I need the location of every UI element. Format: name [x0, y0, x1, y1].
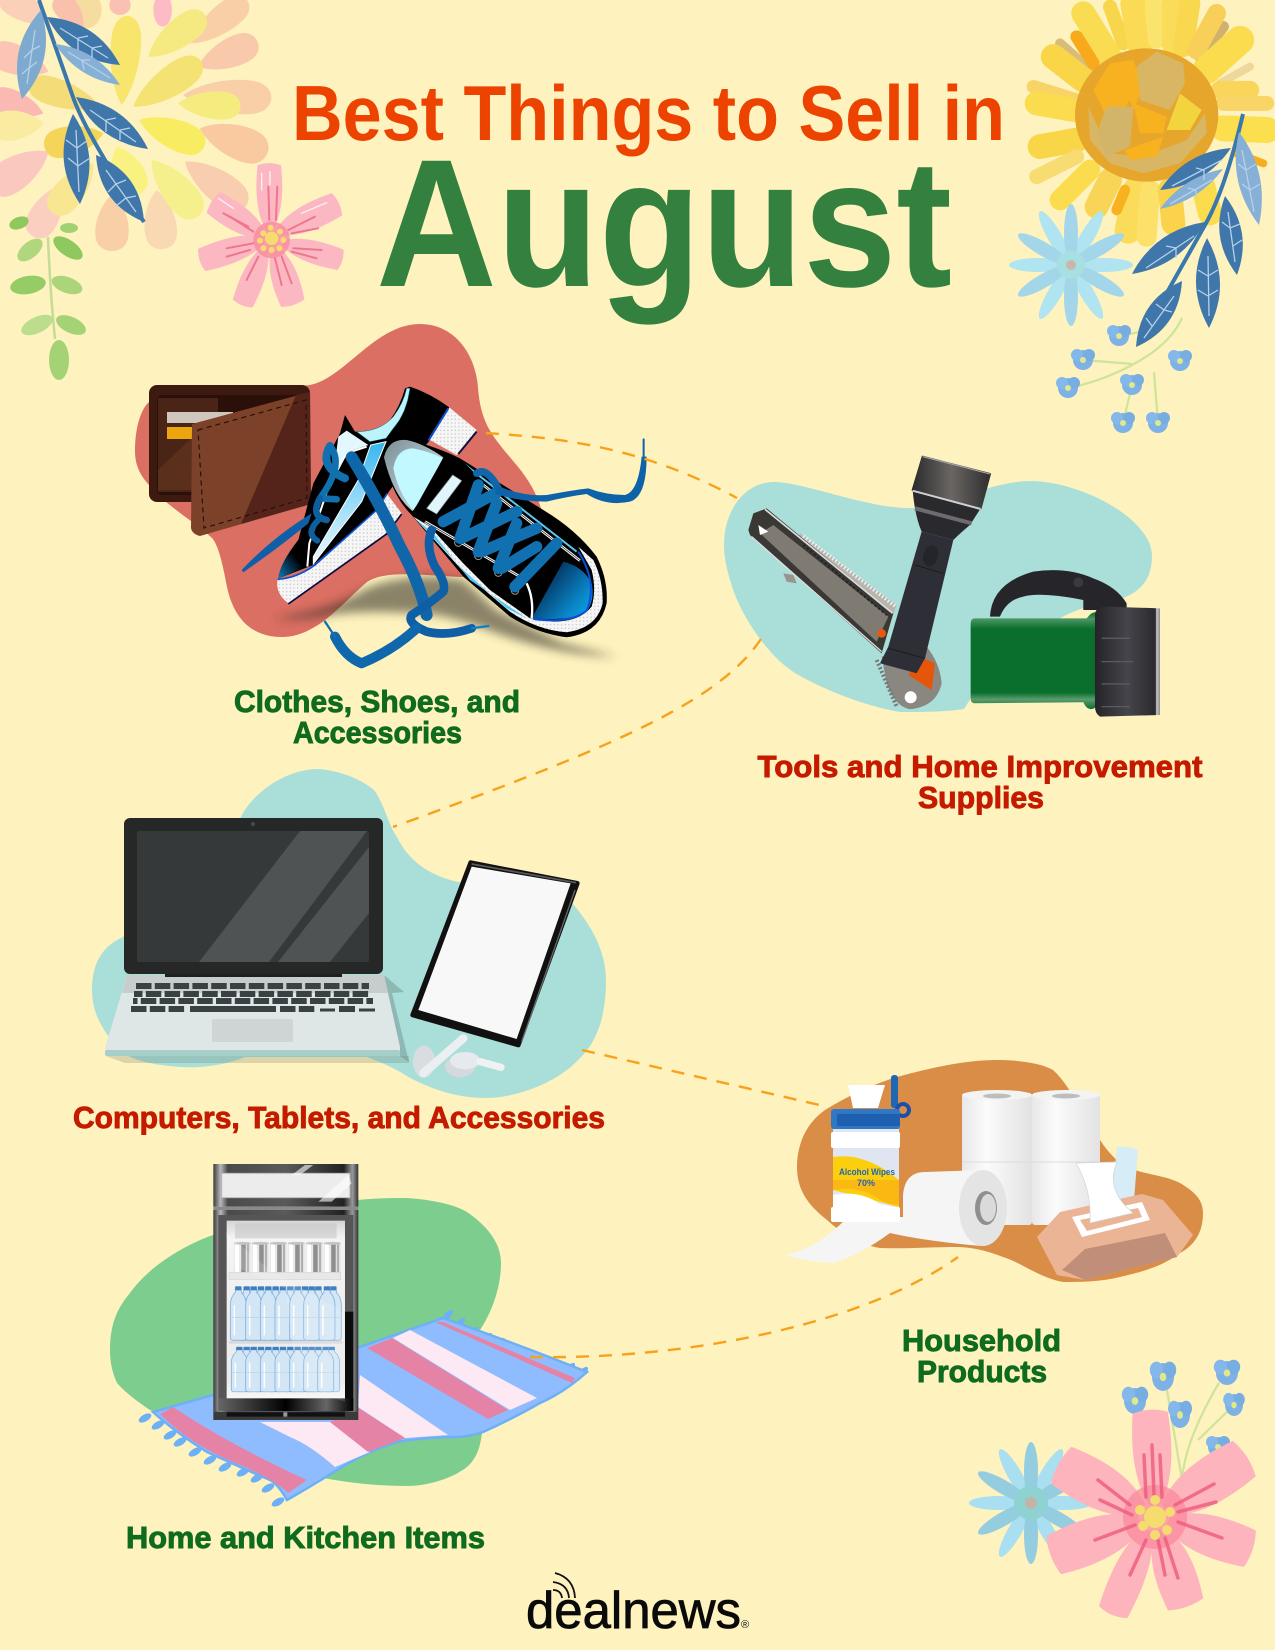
label: Tools and Home Improvement	[758, 749, 1202, 784]
sunflower	[1033, 3, 1267, 237]
earbuds	[413, 1038, 501, 1078]
title line 1: Best Things to Sell in	[292, 69, 1005, 157]
right shoe	[384, 439, 607, 637]
label: Household	[902, 1323, 1061, 1358]
panel: tools and home improvement	[724, 457, 1202, 815]
green branch	[8, 214, 89, 380]
label: Clothes, Shoes, and	[234, 684, 520, 719]
shoe shadow	[273, 577, 617, 657]
blue flower	[1009, 204, 1133, 326]
wipes container: Alcohol Wipes	[839, 1167, 895, 1177]
left shoe	[277, 387, 477, 604]
blue flower	[969, 1442, 1093, 1564]
orange blob	[797, 1060, 1203, 1282]
logo: dealnews: ®	[741, 1619, 749, 1631]
signal arcs	[553, 1573, 575, 1598]
title	[292, 69, 1005, 325]
label	[902, 1323, 1061, 1389]
paper roll	[785, 1170, 1007, 1263]
sneakers	[242, 387, 647, 663]
red blob	[135, 324, 545, 637]
blue leaf branch	[17, 0, 148, 222]
green blob	[110, 1198, 501, 1486]
label: Supplies	[918, 780, 1044, 815]
panel: household products	[785, 1060, 1203, 1389]
pink flower	[196, 163, 346, 310]
floral decoration: top right	[1009, 3, 1267, 433]
teal blob	[92, 769, 606, 1098]
shoe laces	[242, 439, 647, 663]
laptop	[105, 818, 409, 1063]
label: Home and Kitchen Items	[126, 1520, 485, 1555]
label	[758, 749, 1202, 815]
refrigerator	[213, 1164, 358, 1420]
lantern	[971, 570, 1160, 717]
pink flower	[1043, 1409, 1260, 1621]
panel: clothes, shoes and accessories	[135, 324, 647, 750]
dashed connector lines	[393, 433, 958, 1357]
title line 2: August	[376, 121, 952, 325]
label: Accessories	[293, 715, 462, 750]
rug	[137, 1308, 590, 1509]
label: Products	[917, 1354, 1047, 1389]
tablet	[413, 863, 577, 1045]
panel: computers and tablets	[73, 769, 606, 1135]
floral decoration: top left	[0, 0, 346, 380]
teal blob	[724, 481, 1152, 712]
label	[234, 684, 520, 750]
label: Computers, Tablets, and Accessories	[73, 1100, 605, 1135]
floral decoration: bottom right	[969, 1360, 1260, 1621]
logo: dealnews: dealnews	[526, 1582, 741, 1640]
small blue flowers	[1122, 1360, 1245, 1480]
box cutter	[748, 508, 942, 709]
flashlight	[880, 457, 990, 673]
panel: home and kitchen items	[110, 1164, 590, 1555]
small blue flowers	[1056, 318, 1192, 433]
dahlia flower	[0, 0, 273, 252]
wipes container: 70%	[857, 1178, 875, 1188]
paper roll stack	[962, 1090, 1100, 1225]
tissue pack	[1037, 1147, 1193, 1280]
wallet	[149, 385, 311, 536]
blue leaf branch	[1132, 114, 1262, 347]
wipes container	[831, 1075, 909, 1222]
